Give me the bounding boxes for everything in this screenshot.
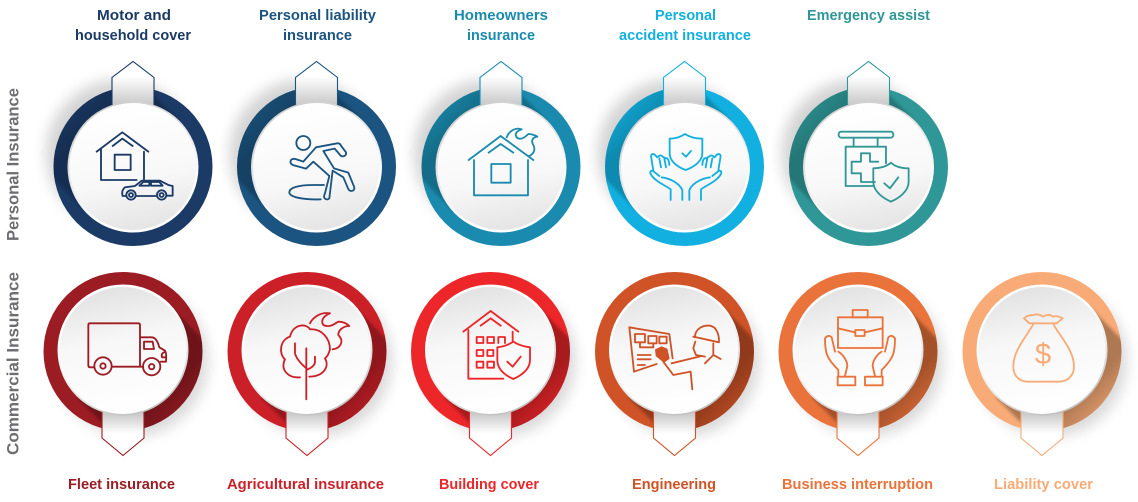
heading: Personal liability insurance: Personal liability [259, 8, 376, 24]
icon: hospital sign and shield [839, 132, 909, 202]
heading: Homeowners insurance: Homeowners [454, 8, 548, 24]
side heading: Commercial Insurance: Commercial Insurance [4, 272, 22, 455]
badge: motor and household cover [0, 0, 212, 246]
heading: Homeowners insurance: insurance [467, 28, 535, 44]
label: Fleet insurance: Fleet insurance [68, 477, 175, 493]
badge: business interruption [778, 272, 1024, 502]
badge: personal accident insurance [518, 0, 764, 246]
badge: fleet insurance [44, 272, 289, 502]
heading: Personal accident insurance: accident insurance [619, 28, 751, 44]
label: Agricultural insurance: Agricultural insurance [227, 477, 384, 493]
icon: hands holding briefcase [825, 310, 895, 385]
icon: delivery truck [88, 323, 166, 375]
icon: hands holding shield [650, 134, 721, 200]
icon: building with shield [463, 311, 530, 379]
heading: Motor and household cover: household cover [75, 28, 191, 44]
heading: Motor and household cover [75, 8, 191, 44]
icon: money bag: $ [1035, 338, 1051, 371]
icon: person slipping [289, 136, 354, 199]
label: Building cover: Building cover [439, 477, 539, 493]
badge: personal liability insurance [150, 0, 396, 246]
heading: Emergency assist: Emergency assist [807, 8, 930, 24]
label: Business interruption: Business interruption [782, 477, 933, 493]
heading: Personal accident insurance [619, 8, 751, 44]
icon: engineer at board [629, 326, 721, 389]
heading: Homeowners insurance [454, 8, 548, 44]
icon: tree on fire [281, 313, 349, 399]
badge: engineering [595, 272, 840, 502]
heading: Personal liability insurance [259, 8, 376, 44]
heading: Personal liability insurance: insurance [283, 28, 352, 44]
label: Liability cover: Liability cover [994, 477, 1093, 493]
badge: building cover [411, 272, 656, 502]
badge: liability cover [962, 272, 1138, 502]
badge: emergency assist [702, 0, 948, 246]
badge: homeowners insurance [335, 0, 580, 246]
heading: Motor and household cover: Motor and [97, 8, 171, 24]
badge: agricultural insurance [228, 272, 473, 502]
icon: house and car [97, 132, 173, 200]
heading: Personal accident insurance: Personal [655, 8, 716, 24]
label: Engineering: Engineering [632, 477, 716, 493]
icon: money bag [1013, 314, 1074, 382]
icon: house on fire [469, 129, 537, 195]
side heading: Personal Insurance: Personal Insurance [4, 88, 22, 241]
